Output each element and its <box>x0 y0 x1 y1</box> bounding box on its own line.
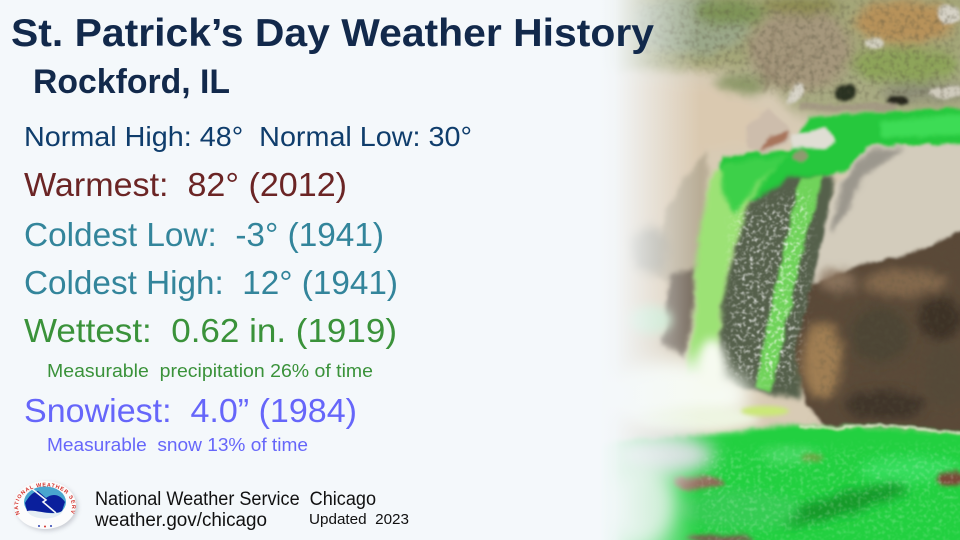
grey shadow on far left <box>630 226 666 274</box>
footer: updated year: Updated 2023 <box>309 511 409 528</box>
bank shadows and stones <box>745 5 960 111</box>
foliage grain <box>640 0 960 100</box>
icon: NWS logo <box>14 482 80 533</box>
snow frequency note: Measurable snow 13% of time <box>47 434 308 455</box>
left rock face <box>656 152 710 282</box>
snowiest record: Snowiest: 4.0” (1984) <box>24 392 357 429</box>
pool tones <box>680 447 960 534</box>
lower green pool <box>590 425 960 540</box>
waterline foam <box>800 426 960 433</box>
coldest low record: Coldest Low: -3° (1941) <box>24 216 384 253</box>
cliff grain <box>816 276 933 394</box>
grey rock shading <box>830 148 905 235</box>
coldest high record: Coldest High: 12° (1941) <box>24 264 398 301</box>
photo: green river waterfall <box>590 0 960 540</box>
second waterfall strand <box>756 174 824 392</box>
mottled dark rock behind falls <box>714 175 835 400</box>
footer: website: weather.gov/chicago <box>94 510 267 531</box>
white mist <box>600 339 760 540</box>
water highlight <box>880 112 960 138</box>
light grey rock <box>812 144 960 300</box>
brown cliff <box>795 228 960 433</box>
precipitation frequency note: Measurable precipitation 26% of time <box>47 360 373 381</box>
warmest record: Warmest: 82° (2012) <box>24 166 347 203</box>
upper bank vegetation <box>590 0 960 120</box>
footer: office name: National Weather Service Chicago <box>95 489 376 510</box>
photo scene <box>590 0 960 540</box>
title: St. Patrick’s Day Weather History <box>11 12 654 55</box>
saturated waterfall top <box>720 155 790 214</box>
upper river <box>716 107 960 205</box>
yellow-green splash <box>741 406 789 416</box>
wettest record: Wettest: 0.62 in. (1919) <box>24 312 397 349</box>
normals: Normal High: 48° Normal Low: 30° <box>24 121 472 152</box>
submerged rocks <box>673 455 960 540</box>
subtitle: location: Rockford, IL <box>33 63 230 101</box>
cliff tones <box>802 270 960 420</box>
falls sparkle <box>728 190 810 385</box>
left fade <box>600 0 700 540</box>
dark stone left of falls <box>662 268 697 358</box>
boulders on the lip <box>746 110 836 162</box>
sandy left slope <box>711 84 748 104</box>
green shallows left <box>628 306 672 334</box>
pool specks <box>700 445 960 540</box>
main waterfall strand <box>686 165 775 378</box>
